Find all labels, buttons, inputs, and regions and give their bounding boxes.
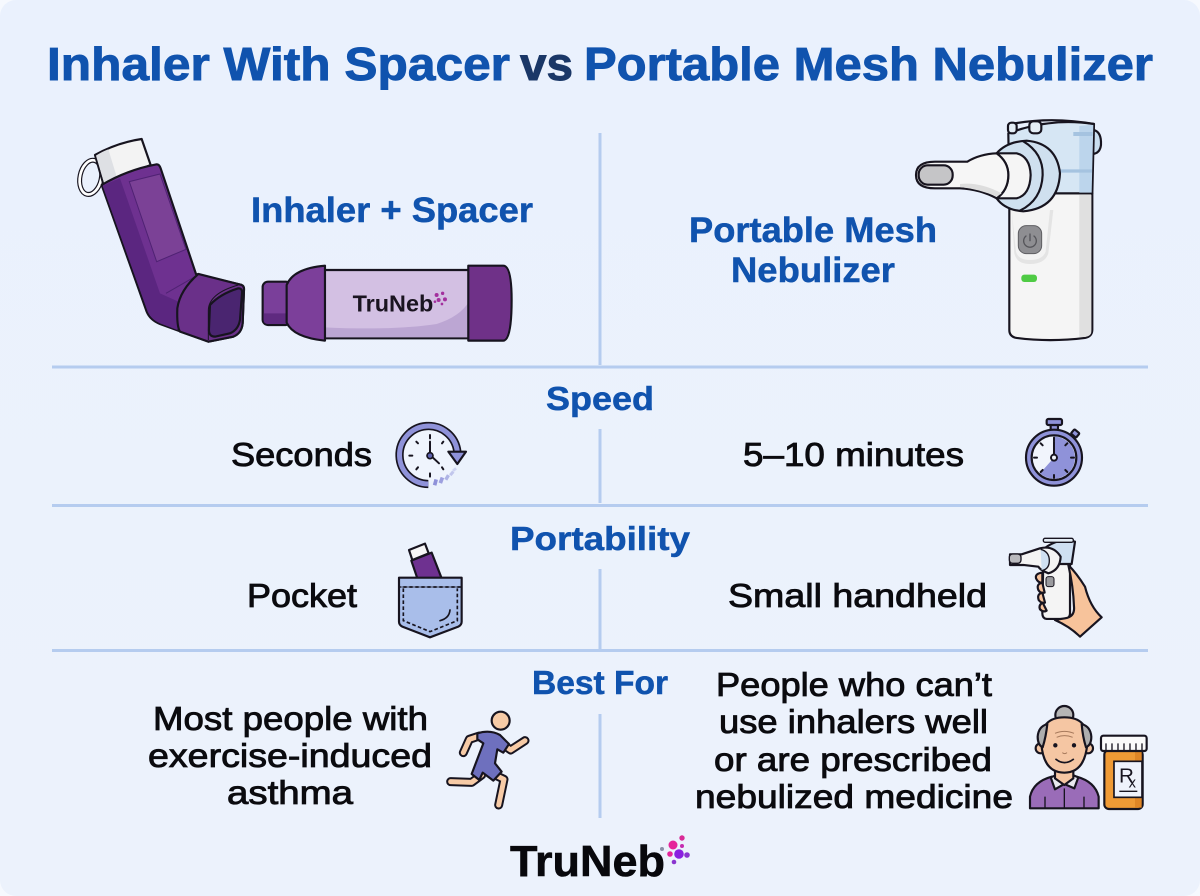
text: Most people with exercise-induced asthma: exercise-induced: [148, 737, 432, 774]
title: Portable Mesh Nebulizer: [584, 38, 1153, 90]
icon: inhaler in pocket: [399, 544, 462, 637]
text: Most people with exercise-induced asthma: asthma: [227, 774, 354, 811]
text: People who can't use inhalers well or are prescribed nebulized medicine: nebulized medicine: [695, 778, 1013, 815]
title: vs: [520, 38, 573, 90]
title: [47, 38, 1153, 90]
heading: Portable Mesh Nebulizer: Portable Mesh: [689, 211, 937, 250]
icon: portable mesh nebulizer: [916, 120, 1101, 340]
text: Most people with exercise-induced asthma: Most people with: [153, 700, 428, 737]
icon: elderly man: [1030, 706, 1099, 808]
title: Inhaler With Spacer: [47, 38, 510, 90]
icon: runner: [451, 712, 525, 805]
section heading: Portability: Portability: [510, 520, 691, 557]
icon: purple inhaler: [77, 139, 244, 342]
text: People who can't use inhalers well or are prescribed nebulized medicine: use inhalers well: [719, 703, 988, 740]
text: Most people with exercise-induced asthma: [148, 700, 432, 811]
label: 5–10 minutes: 5–10 minutes: [743, 436, 964, 473]
heading: Portable Mesh Nebulizer: Nebulizer: [731, 251, 895, 290]
label: Pocket: Pocket: [247, 577, 357, 614]
label: Small handheld: Small handheld: [728, 577, 987, 614]
icon: prescription bottle: x: [1129, 775, 1137, 791]
heading: Inhaler + Spacer: Inhaler + Spacer: [251, 191, 533, 230]
heading: Portable Mesh Nebulizer: [689, 211, 937, 290]
icon: prescription bottle: R: [1119, 765, 1134, 788]
text: People who can't use inhalers well or are prescribed nebulized medicine: or are prescribed: [714, 741, 992, 778]
icon: prescription bottle: [1101, 736, 1147, 809]
text: People who can't use inhalers well or are prescribed nebulized medicine: [695, 666, 1013, 815]
text: People who can't use inhalers well or are prescribed nebulized medicine: People who can’t: [716, 666, 992, 703]
icon: spacer chamber with TruNeb label: [263, 266, 512, 341]
logo: TruNeb: TruNeb: [510, 837, 665, 886]
section heading: Best For: Best For: [532, 664, 668, 701]
icon: hand holding nebulizer: [1009, 538, 1102, 637]
label: Seconds: Seconds: [231, 436, 372, 473]
section heading: Speed: Speed: [546, 380, 654, 417]
icon: stopwatch: [1026, 419, 1082, 486]
icon: spacer chamber with TruNeb label: TruNeb: [353, 291, 433, 317]
icon: clock with rotating arrow: [400, 426, 466, 486]
